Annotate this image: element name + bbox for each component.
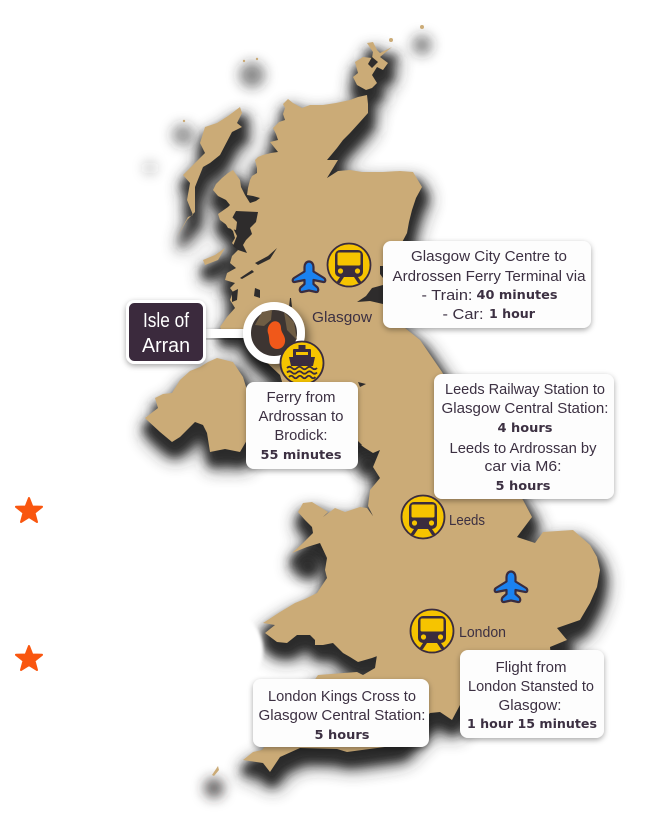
label: Leeds: Leeds [449,512,485,529]
icon: London train [410,610,454,652]
callout: Glasgow City Centre journey: 40 minutes [476,288,558,302]
callout: Leeds journey: Glasgow Central Station: [442,400,608,417]
callout: London train journey: Glasgow Central Station: [258,707,426,724]
callout: Leeds journey: Leeds Railway Station to [445,381,605,398]
callout: Leeds journey: car via M6: [484,458,562,475]
callout: London train journey: London Kings Cross to [268,688,416,705]
callout: London train journey [253,679,429,747]
callout: London train journey: 5 hours [314,728,370,742]
icon: ferry [280,342,324,384]
icon: Glasgow train [328,244,370,286]
callout: Glasgow City Centre journey: Glasgow City Centre to [411,248,567,265]
callout: Leeds journey: 5 hours [496,479,550,493]
callout: Glasgow City Centre journey [383,241,591,328]
star marker: upper [16,498,42,522]
icon: Glasgow plane [293,262,325,292]
callout: Isle of Arran [128,302,204,362]
callout: flight from London [460,650,604,738]
callout: Glasgow City Centre journey: - Train: [422,287,472,304]
callout: Leeds journey: 4 hours [498,421,552,435]
callout: Isle of Arran: Arran [142,335,190,357]
label: Glasgow: Glasgow [312,309,372,326]
callout: flight from London: Glasgow: [498,697,562,714]
label: London: London [459,624,506,641]
callout: Glasgow City Centre journey: Ardrossen Ferry Terminal via [392,268,586,285]
callout: ferry journey: Ferry from [266,389,336,406]
callout: Glasgow City Centre journey: - Car: [442,306,484,323]
callout: Isle of Arran: Isle of [143,310,189,332]
icon: Leeds train [402,496,444,538]
callout: flight from London: London Stansted to [468,678,594,695]
callout: ferry journey: Ardrossan to [258,408,344,425]
callout: flight from London: Flight from [496,659,566,676]
map of Great Britain and Northern Ireland [144,25,603,798]
icon: Arran island [268,321,285,349]
callout: ferry journey [246,382,358,469]
icon: London plane [495,572,527,602]
callout: Glasgow City Centre journey: 1 hour [489,307,535,321]
callout: ferry journey: 55 minutes [260,448,342,462]
callout: Leeds journey [434,374,614,499]
callout: ferry journey: Brodick: [274,427,328,444]
callout: Leeds journey: Leeds to Ardrossan by [450,440,597,457]
callout: flight from London: 1 hour 15 minutes [467,717,597,731]
Isle of Arran locator lens [204,306,301,360]
star marker: lower [16,646,42,670]
